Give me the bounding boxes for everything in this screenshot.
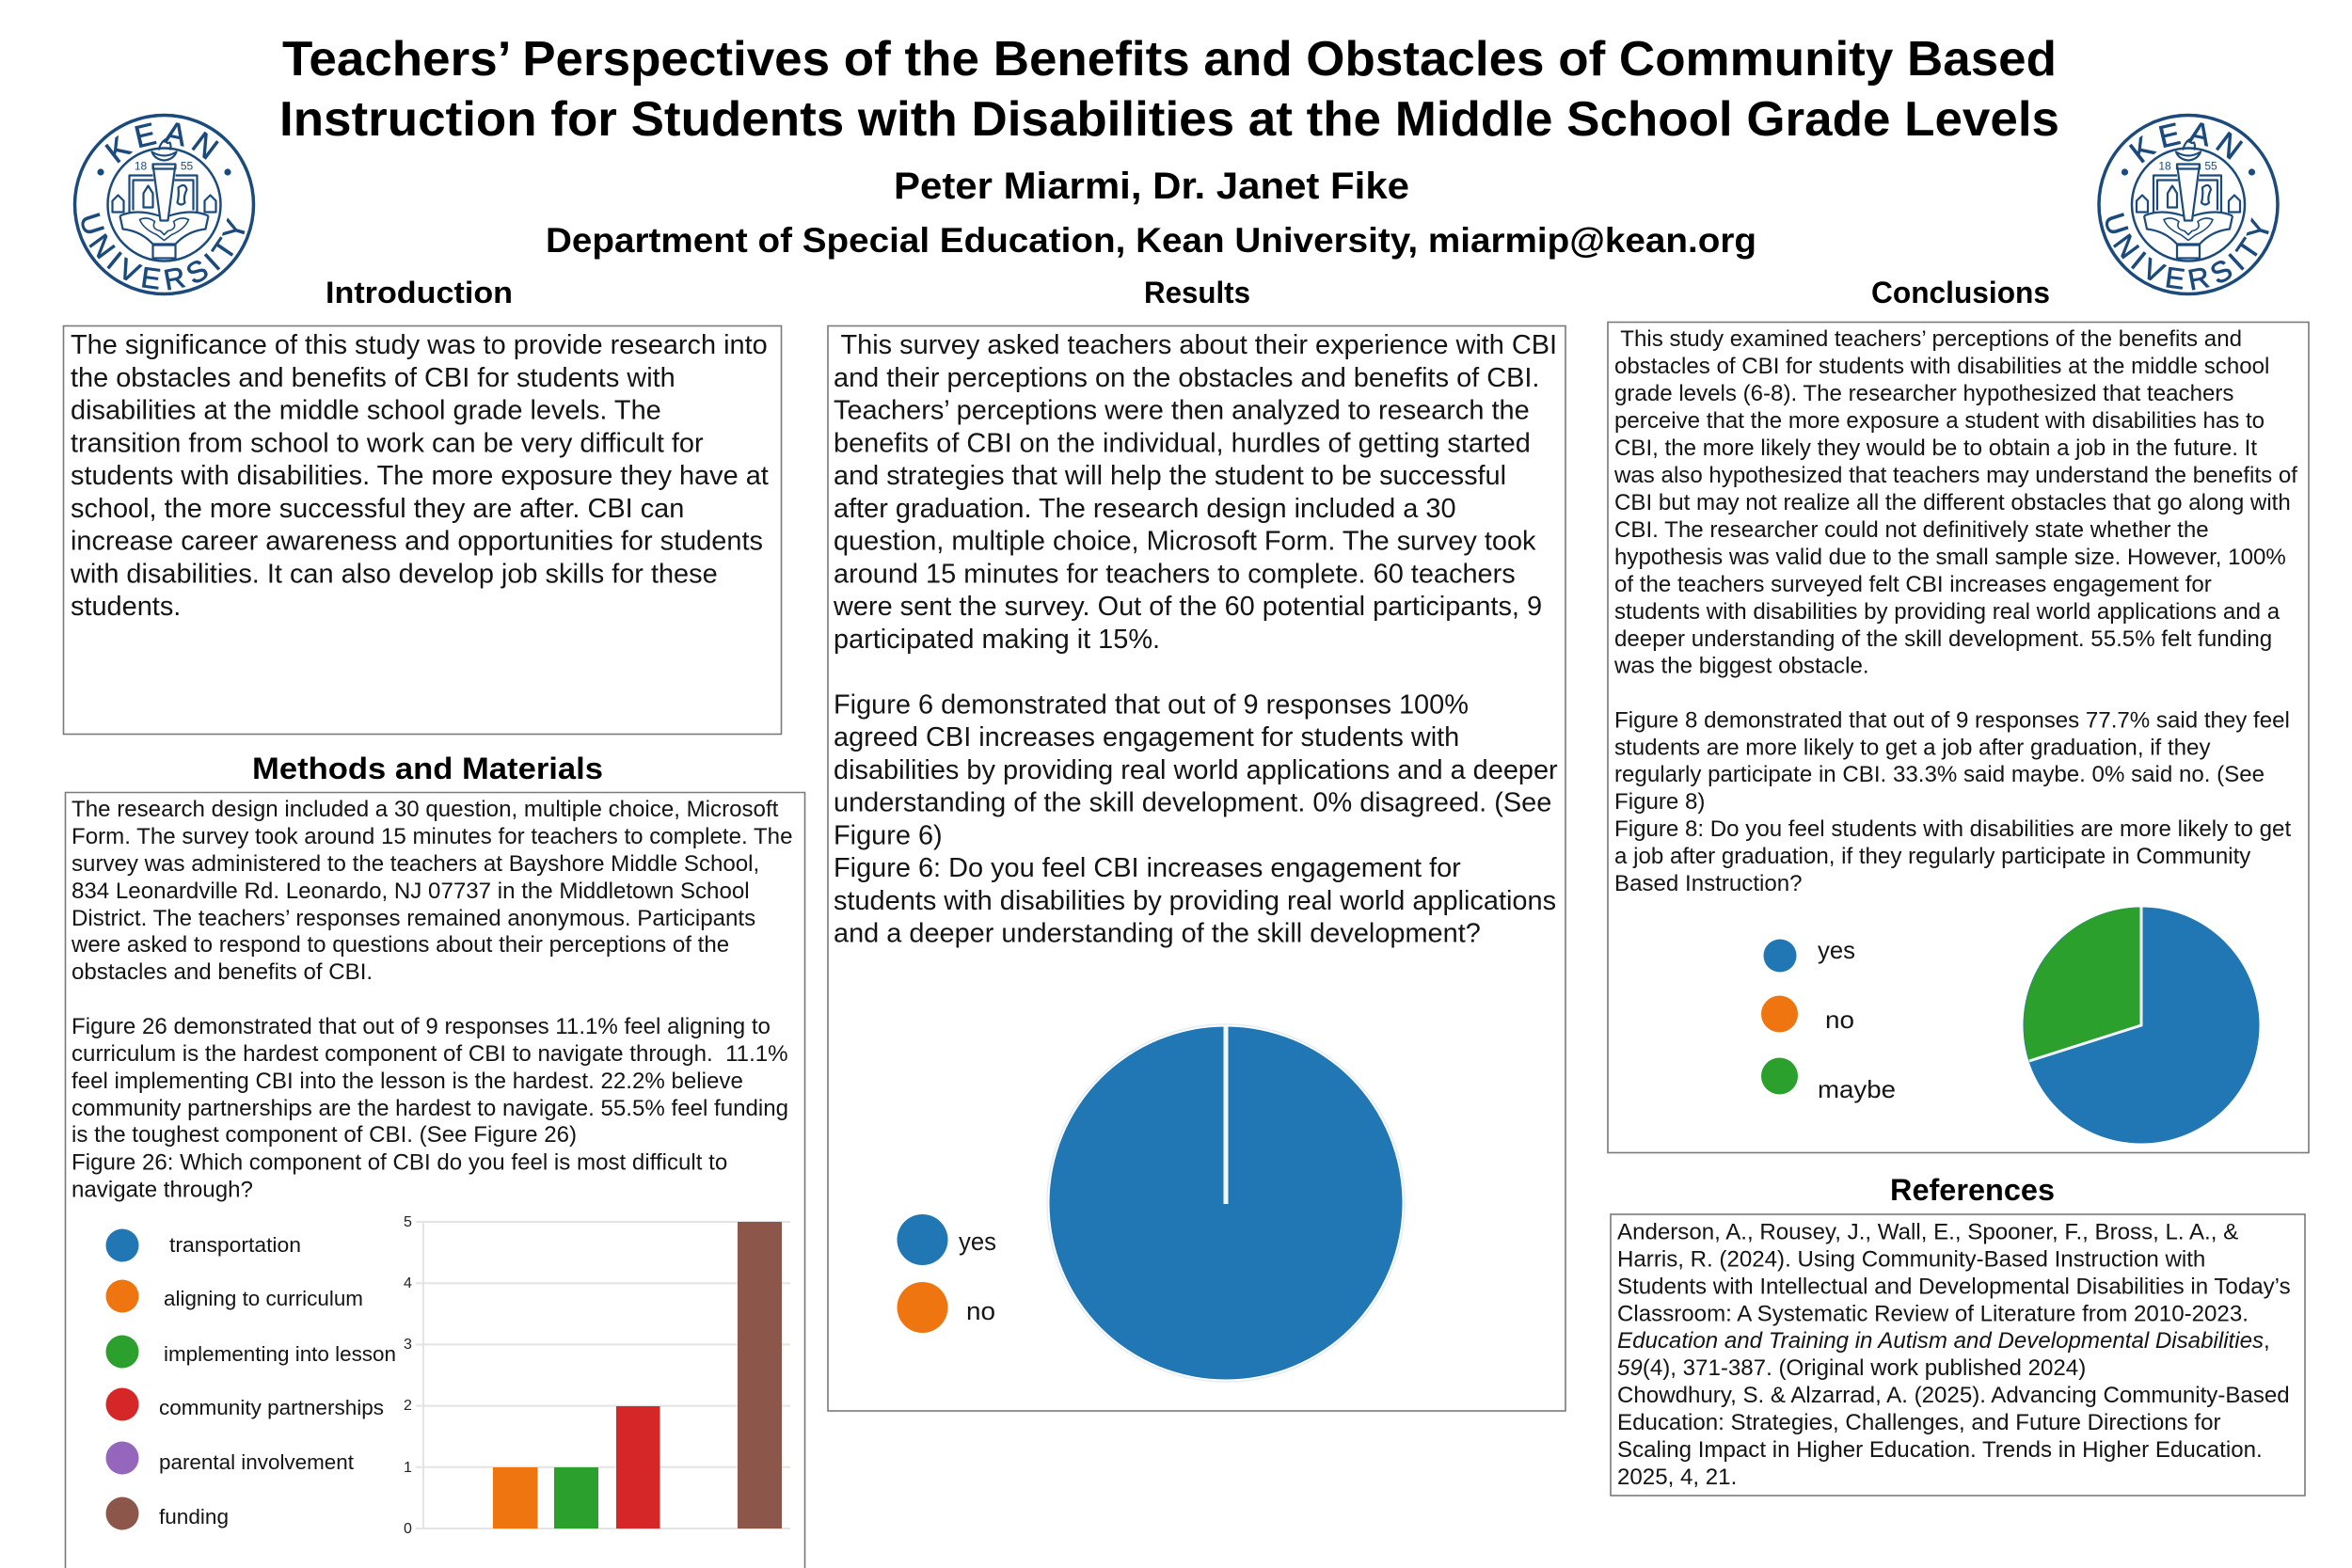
heading: Results: Results <box>1144 276 1250 309</box>
legend: figure 6: yes <box>959 1227 996 1256</box>
text: figure 26 findings: Figure 26 demonstrated that out of 9 responses 11.1% feel aligning to <box>72 1014 771 1039</box>
panel: results <box>828 325 1565 1411</box>
panel: introduction: school, the more successful they are after. CBI can <box>71 494 684 524</box>
text: figure 26 findings <box>72 1014 788 1202</box>
panel: references: Scaling Impact in Higher Education. Trends in Higher Education. <box>1617 1437 2263 1463</box>
text: survey description: around 15 minutes for teachers to complete. 60 teachers <box>834 559 1516 589</box>
icon: Kean University seal left: 18 <box>135 160 147 173</box>
heading: References: References <box>1890 1173 2055 1207</box>
panel: introduction: the obstacles and benefits of CBI for students with <box>71 363 675 393</box>
text: figure 26 findings: Figure 26: Which component of CBI do you feel is most difficult to <box>72 1149 727 1176</box>
heading: Methods and Materials: Methods and Materials <box>252 752 603 785</box>
text: figure 8 findings: Based Instruction? <box>1614 871 1803 896</box>
heading: Conclusions: Conclusions <box>1871 276 2050 309</box>
text: study description: Form. The survey took around 15 minutes for teachers to complete. The <box>72 824 792 849</box>
panel: introduction: with disabilities. It can also develop job skills for these <box>70 559 718 589</box>
panel: references: Chowdhury, S. & Alzarrad, A. (2025). Advancing Community-Based <box>1617 1383 2290 1408</box>
panel: references: Education: Strategies, Challenges, and Future Directions for <box>1617 1410 2221 1435</box>
text: conclusions summary: deeper understanding of the skill development. 55.5% felt funding <box>1614 626 2272 652</box>
legend: figure 6: no <box>966 1297 995 1325</box>
text: figure 26 findings: is the toughest component of CBI. (See Figure 26) <box>72 1122 577 1148</box>
title <box>279 32 2059 147</box>
panel: introduction <box>64 325 781 734</box>
legend: figure 6 <box>898 1214 996 1333</box>
text: survey description: Teachers’ perceptions were then analyzed to research the <box>834 395 1530 425</box>
text: study description: were asked to respond to questions about their perceptions of the <box>71 932 729 958</box>
panel: references: 2025, 4, 21. <box>1617 1465 1737 1490</box>
text: study description: The research design included a 30 question, multiple choice, Microsoft <box>72 797 779 822</box>
text: study description: survey was administered to the teachers at Bayshore Middle School, <box>72 851 759 877</box>
text: study description: District. The teachers’ responses remained anonymous. Participants <box>72 906 755 931</box>
text: figure 6 findings: Figure 6: Do you feel CBI increases engagement for <box>834 853 1461 883</box>
panel: introduction: students. <box>71 592 181 622</box>
text: survey description <box>833 330 1557 655</box>
legend: figure 8: yes <box>1818 936 1855 964</box>
bar chart: figure 26: 0 <box>404 1521 412 1537</box>
legend: figure 8: no <box>1825 1006 1854 1034</box>
icon: Kean University seal right: 18 <box>2158 160 2171 173</box>
text: survey description: participated making it 15%. <box>834 625 1160 655</box>
legend: figure 26 <box>105 1228 396 1529</box>
panel: references <box>1611 1214 2305 1496</box>
department and contact: Department of Special Education, Kean University, miarmip@kean.org <box>546 221 1756 260</box>
text: figure 6 findings: understanding of the skill development. 0% disagreed. (See <box>834 788 1551 818</box>
text: figure 6 findings: disabilities by providing real world applications and a deeper <box>834 755 1558 785</box>
text: figure 6 findings: agreed CBI increases engagement for students with <box>834 722 1459 752</box>
pie chart: figure 8 <box>2023 907 2260 1144</box>
text: conclusions summary: was also hypothesized that teachers may understand the benefits of <box>1613 463 2297 488</box>
panel: references: 59(4), 371-387. (Original work published 2024) <box>1617 1355 2086 1381</box>
text: survey description: and strategies that will help the student to be successful <box>834 461 1506 491</box>
text: survey description: benefits of CBI on the individual, hurdles of getting started <box>834 428 1531 458</box>
text: conclusions summary: obstacles of CBI for students with disabilities at the middle school <box>1614 354 2269 379</box>
authors: Peter Miarmi, Dr. Janet Fike <box>894 166 1409 207</box>
bar chart: figure 26: 1 <box>404 1460 412 1476</box>
bar chart: figure 26: 5 <box>404 1214 412 1230</box>
text: conclusions summary: This study examined teachers’ perceptions of the benefits and <box>1614 326 2242 352</box>
icon: Kean University seal right: 55 <box>2204 160 2217 173</box>
panel: references: Harris, R. (2024). Using Community-Based Instruction with <box>1617 1247 2205 1272</box>
panel: introduction: students with disabilities. The more exposure they have at <box>71 461 769 491</box>
legend: figure 26: parental involvement <box>159 1450 355 1474</box>
text: conclusions summary: CBI, the more likely they would be to obtain a job in the future. It <box>1614 436 2257 461</box>
text: conclusions summary: CBI but may not realize all the different obstacles that go along with <box>1614 490 2291 515</box>
text: survey description: question, multiple choice, Microsoft Form. The survey took <box>834 527 1536 557</box>
text: figure 8 findings <box>1614 707 2291 896</box>
text: conclusions summary: was the biggest obstacle. <box>1613 653 1869 679</box>
text: figure 6 findings: and a deeper understanding of the skill development? <box>834 918 1481 948</box>
panel: references: Anderson, A., Rousey, J., Wall, E., Spooner, F., Bross, L. A., & <box>1617 1219 2238 1245</box>
icon: Kean University seal left <box>73 113 256 295</box>
text: conclusions summary: perceive that the more exposure a student with disabilities has to <box>1614 408 2265 434</box>
panel: references: Education and Training in Autism and Developmental Disabilities, <box>1617 1328 2270 1354</box>
text: survey description: This survey asked teachers about their experience with CBI <box>834 330 1557 360</box>
text: conclusions summary: CBI. The researcher could not definitively state whether the <box>1614 517 2209 543</box>
text: figure 26 findings: community partnerships are the hardest to navigate. 55.5% feel funding <box>72 1096 788 1121</box>
legend: figure 26: aligning to curriculum <box>164 1287 363 1310</box>
text: figure 8 findings: Figure 8: Do you feel students with disabilities are more likely to get <box>1614 816 2291 842</box>
text: figure 8 findings: Figure 8 demonstrated that out of 9 responses 77.7% said they feel <box>1614 707 2290 734</box>
text: figure 8 findings: a job after graduation, if they regularly participate in Community <box>1614 844 2250 869</box>
text: survey description: after graduation. The research design included a 30 <box>834 494 1456 524</box>
text: figure 6 findings: Figure 6 demonstrated that out of 9 responses 100% <box>834 689 1469 720</box>
icon: Kean University seal left: UNIVERSITY <box>81 213 245 290</box>
legend: figure 26: community partnerships <box>159 1396 384 1419</box>
text: figure 6 findings: students with disabilities by providing real world applications <box>834 886 1556 916</box>
icon: Kean University seal left: KEAN <box>104 122 219 164</box>
text: survey description: were sent the survey. Out of the 60 potential participants, 9 <box>833 592 1542 622</box>
icon: Kean University seal left: 55 <box>181 160 193 173</box>
panel: methods and materials <box>66 792 805 1568</box>
panel: conclusions <box>1608 322 2309 1153</box>
text: figure 8 findings: Figure 8) <box>1614 789 1705 815</box>
panel: introduction: The significance of this study was to provide research into <box>71 330 768 360</box>
text: study description <box>71 797 792 985</box>
legend: figure 26: transportation <box>169 1233 301 1257</box>
text: study description: 834 Leonardville Rd. Leonardo, NJ 07737 in the Middletown School <box>72 879 750 904</box>
bar chart: figure 26: 4 <box>404 1275 412 1291</box>
panel: introduction: transition from school to work can be very difficult for <box>71 428 704 458</box>
icon: Kean University seal right <box>2097 113 2280 295</box>
legend: figure 8: maybe <box>1818 1075 1896 1103</box>
text: figure 26 findings: feel implementing CBI into the lesson is the hardest. 22.2% believe <box>72 1069 743 1094</box>
icon: Kean University seal right: UNIVERSITY <box>2106 213 2269 290</box>
legend: figure 26: implementing into lesson <box>164 1342 396 1366</box>
text: figure 6 findings <box>834 689 1558 948</box>
bar chart: figure 26: 2 <box>404 1398 412 1414</box>
text: survey description: and their perceptions on the obstacles and benefits of CBI. <box>834 363 1539 393</box>
heading: Introduction: Introduction <box>326 276 513 309</box>
text: figure 8 findings: regularly participate in CBI. 33.3% said maybe. 0% said no. (See <box>1614 762 2265 787</box>
bar chart: figure 26 <box>404 1214 790 1537</box>
text: conclusions summary: grade levels (6-8). The researcher hypothesized that teachers <box>1614 381 2233 406</box>
text: study description: obstacles and benefits of CBI. <box>72 959 373 985</box>
text: conclusions summary: of the teachers surveyed felt CBI increases engagement for <box>1614 572 2212 597</box>
panel: references: Students with Intellectual and Developmental Disabilities in Today’s <box>1617 1274 2291 1300</box>
text: figure 6 findings: Figure 6) <box>834 820 943 850</box>
bar chart: figure 26: 3 <box>404 1337 412 1353</box>
text: figure 26 findings: curriculum is the hardest component of CBI to navigate through. 11.1% <box>72 1041 788 1067</box>
icon: Kean University seal right: KEAN <box>2128 122 2243 164</box>
legend: figure 26: funding <box>159 1505 229 1528</box>
text: figure 26 findings: navigate through? <box>72 1178 253 1202</box>
pie chart: figure 6 <box>1047 1024 1405 1382</box>
text: figure 8 findings: students are more likely to get a job after graduation, if they <box>1614 736 2211 760</box>
panel: introduction: disabilities at the middle school grade levels. The <box>71 395 661 425</box>
text: conclusions summary <box>1613 326 2297 679</box>
text: conclusions summary: students with disabilities by providing real world applications and a <box>1614 599 2280 625</box>
panel: introduction: increase career awareness and opportunities for students <box>71 527 763 557</box>
title: Teachers’ Perspectives of the Benefits and Obstacles of Community Based <box>282 32 2057 87</box>
panel: references: Classroom: A Systematic Review of Literature from 2010-2023. <box>1617 1302 2249 1326</box>
title: Instruction for Students with Disabilities at the Middle School Grade Levels <box>279 92 2059 147</box>
text: conclusions summary: hypothesis was valid due to the small sample size. However, 100% <box>1614 545 2286 570</box>
legend: figure 8 <box>1761 936 1896 1103</box>
